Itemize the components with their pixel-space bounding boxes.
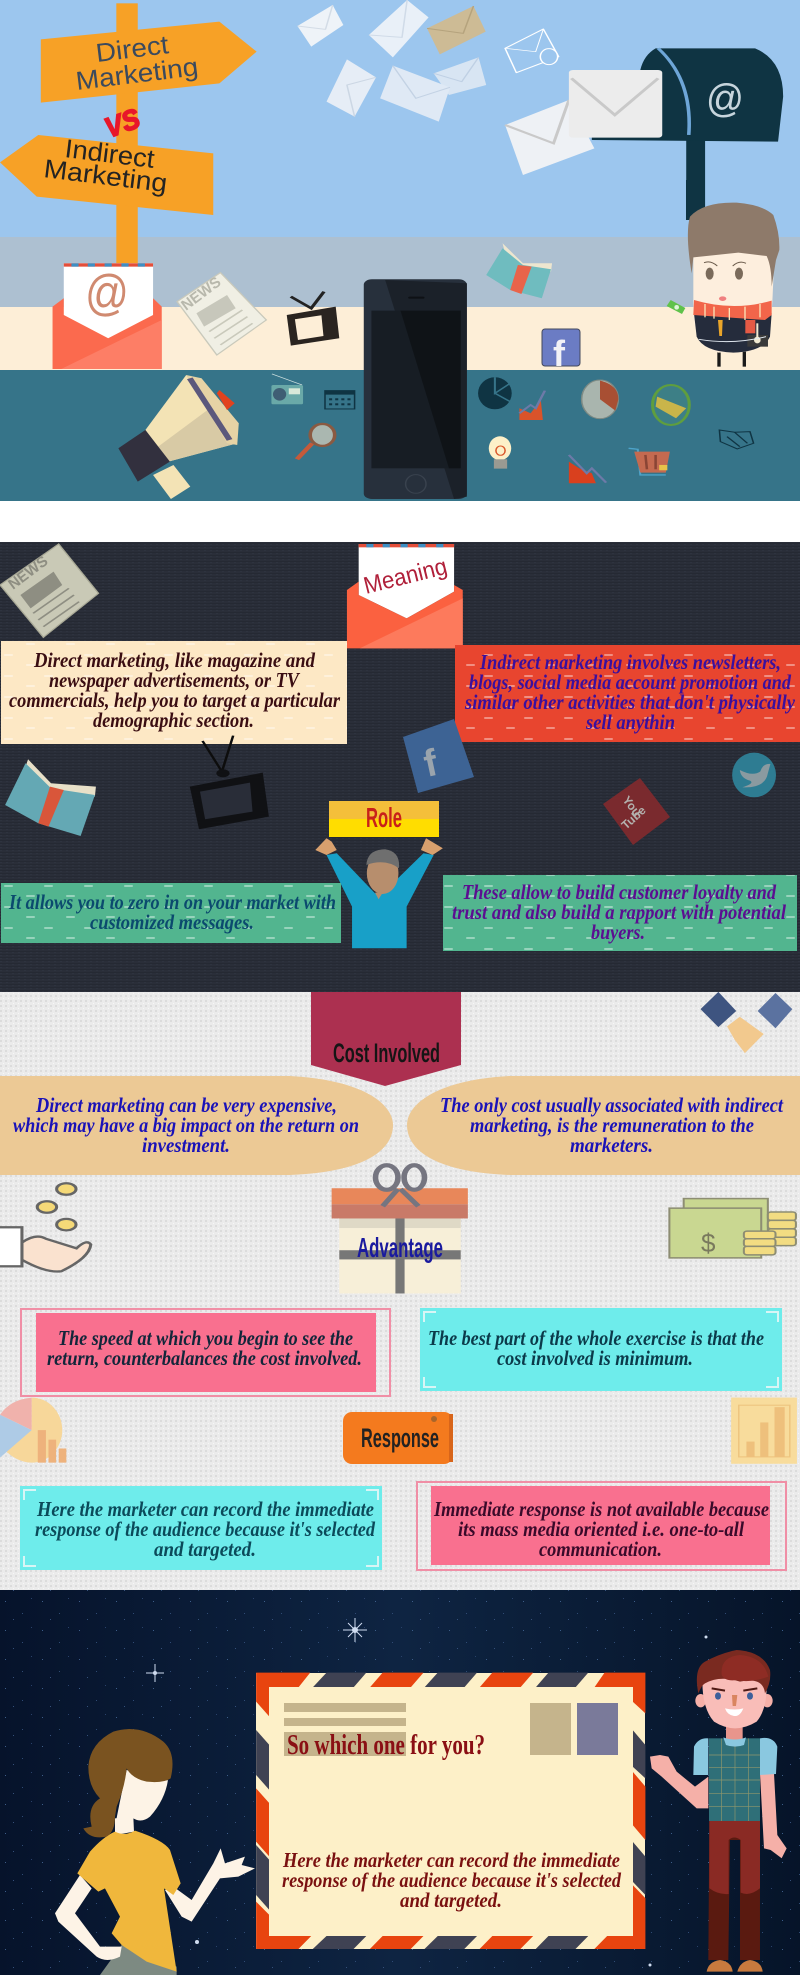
icon: money and coins: $ bbox=[701, 1228, 716, 1258]
sign text: Direct Marketing bbox=[74, 29, 200, 96]
icon: man character bbox=[650, 1650, 787, 1972]
signpost bbox=[0, 3, 257, 263]
text block: indirect marketing role: buyers. bbox=[591, 920, 645, 944]
heading: response button bbox=[343, 1412, 453, 1464]
text block: direct marketing cost: which may have a big impact on the return on bbox=[13, 1113, 359, 1137]
text block: direct marketing advantage bbox=[21, 1309, 390, 1396]
icon: youtube: Tube bbox=[619, 803, 649, 832]
text block: direct marketing response: Here the marketer can record the immediate bbox=[36, 1497, 374, 1521]
text block: direct marketing role: customized messages. bbox=[90, 910, 254, 934]
icon: media and marketing icons on teal band bbox=[271, 374, 754, 483]
icon: pie chart bbox=[0, 1398, 66, 1463]
sign text: Indirect Marketing: Indirect bbox=[63, 133, 157, 174]
heading: role banner: Role bbox=[366, 802, 402, 833]
text block: conclusion bbox=[282, 1848, 621, 1912]
heading: meaning envelope: Meaning bbox=[361, 553, 450, 600]
text block: direct marketing meaning: newspaper advertisements, or TV bbox=[49, 668, 301, 692]
icon: newspaper bbox=[0, 544, 98, 637]
text block: indirect marketing meaning bbox=[455, 645, 800, 742]
icon: bar chart card bbox=[731, 1398, 797, 1464]
heading: role banner bbox=[329, 801, 439, 837]
icon: youtube bbox=[603, 778, 670, 845]
icon: woman character bbox=[55, 1729, 255, 1975]
icon: money and coins bbox=[669, 1199, 796, 1258]
icon: boy character bbox=[667, 180, 779, 367]
text block: indirect marketing advantage: cost involved is minimum. bbox=[497, 1346, 693, 1370]
icon: man holding banner bbox=[315, 838, 443, 948]
icon: television bbox=[287, 292, 339, 346]
text block: conclusion: and targeted. bbox=[400, 1888, 502, 1912]
heading: cost involved banner: Cost Involved bbox=[333, 1038, 440, 1068]
icon: twitter bbox=[732, 753, 776, 797]
text block: conclusion: response of the audience because it's selected bbox=[282, 1868, 621, 1892]
icon: mailbox with letters bbox=[505, 48, 783, 215]
text block: direct marketing meaning: demographic section. bbox=[93, 708, 254, 732]
icon: handshake diamonds bbox=[701, 992, 792, 1053]
text block: direct marketing role: It allows you to zero in on your market with bbox=[8, 890, 336, 914]
text block: direct marketing cost: investment. bbox=[142, 1133, 230, 1157]
icon: at-mail envelope: @ bbox=[85, 265, 129, 321]
icon: book bbox=[5, 759, 96, 836]
text block: direct marketing meaning: Direct marketing, like magazine and bbox=[33, 648, 315, 672]
icon: facebook tile bbox=[542, 329, 580, 374]
text block: direct marketing response bbox=[20, 1486, 382, 1570]
icon: television bbox=[190, 736, 269, 829]
text block: indirect marketing response bbox=[417, 1482, 786, 1570]
text block: indirect marketing role bbox=[443, 875, 797, 951]
icon: flying envelopes bbox=[297, 0, 559, 122]
text block: direct marketing meaning bbox=[1, 641, 347, 744]
heading: meaning envelope bbox=[347, 544, 463, 648]
panel: conclusion night scene bbox=[0, 1590, 800, 1975]
icon: facebook tile: f bbox=[553, 333, 566, 374]
vs label: VS bbox=[100, 102, 144, 144]
address lines bbox=[284, 1703, 406, 1756]
panel: meaning and role bbox=[0, 542, 800, 992]
text block: indirect marketing response: its mass media oriented i.e. one-to-all bbox=[458, 1517, 744, 1541]
panel: hero scene bbox=[0, 0, 800, 501]
envelope card bbox=[256, 1673, 645, 1949]
stamps bbox=[530, 1703, 618, 1755]
sign text: Direct Marketing: Marketing bbox=[74, 51, 200, 96]
text block: indirect marketing meaning: sell anythin bbox=[585, 710, 675, 734]
text block: direct marketing cost bbox=[0, 1076, 393, 1175]
heading: so which one for you: So which one for you? bbox=[287, 1729, 485, 1761]
sign text: Indirect Marketing bbox=[42, 133, 169, 198]
text block: direct marketing advantage: return, counterbalances the cost involved. bbox=[47, 1346, 362, 1370]
icon: hand with coins bbox=[0, 1183, 91, 1272]
text block: indirect marketing advantage bbox=[420, 1308, 782, 1391]
heading: response button: Response bbox=[361, 1423, 439, 1453]
heading: cost involved banner bbox=[311, 992, 461, 1086]
text block: direct marketing meaning: commercials, help you to target a particular bbox=[9, 688, 341, 712]
icon: at-mail envelope bbox=[53, 263, 162, 369]
text block: direct marketing role bbox=[1, 883, 341, 943]
heading: advantage gift box: Advantage bbox=[357, 1232, 443, 1263]
text block: direct marketing response: and targeted. bbox=[154, 1537, 256, 1561]
icon: facebook tile bbox=[403, 719, 474, 793]
heading: advantage gift box bbox=[332, 1165, 468, 1293]
icon: youtube: You bbox=[620, 793, 644, 819]
panel: cost, advantage and response bbox=[0, 992, 800, 1590]
text block: conclusion: Here the marketer can record the immediate bbox=[282, 1848, 620, 1872]
text block: direct marketing cost: Direct marketing can be very expensive, bbox=[35, 1093, 337, 1117]
text block: direct marketing advantage: The speed at which you begin to see the bbox=[58, 1326, 353, 1350]
sign text: Direct Marketing: Direct bbox=[94, 29, 171, 68]
icon: book bbox=[486, 243, 552, 298]
text block: direct marketing response: response of the audience because it's selected bbox=[35, 1517, 375, 1541]
icon: phone bbox=[364, 279, 467, 499]
icon: newspaper: NEWS bbox=[5, 553, 51, 593]
icon: newspaper bbox=[177, 273, 266, 355]
icon: megaphone bbox=[118, 375, 239, 499]
text block: indirect marketing cost: marketing, is the remuneration to the bbox=[470, 1113, 754, 1137]
sign text: Indirect Marketing: Marketing bbox=[42, 153, 169, 198]
icon: facebook tile: f bbox=[420, 742, 442, 786]
icon: mailbox with letters: @ bbox=[706, 77, 744, 121]
text block: indirect marketing cost bbox=[407, 1076, 800, 1175]
text block: indirect marketing response: communication. bbox=[539, 1537, 662, 1561]
icon: newspaper: NEWS bbox=[178, 274, 224, 314]
text block: indirect marketing cost: marketers. bbox=[570, 1133, 653, 1157]
